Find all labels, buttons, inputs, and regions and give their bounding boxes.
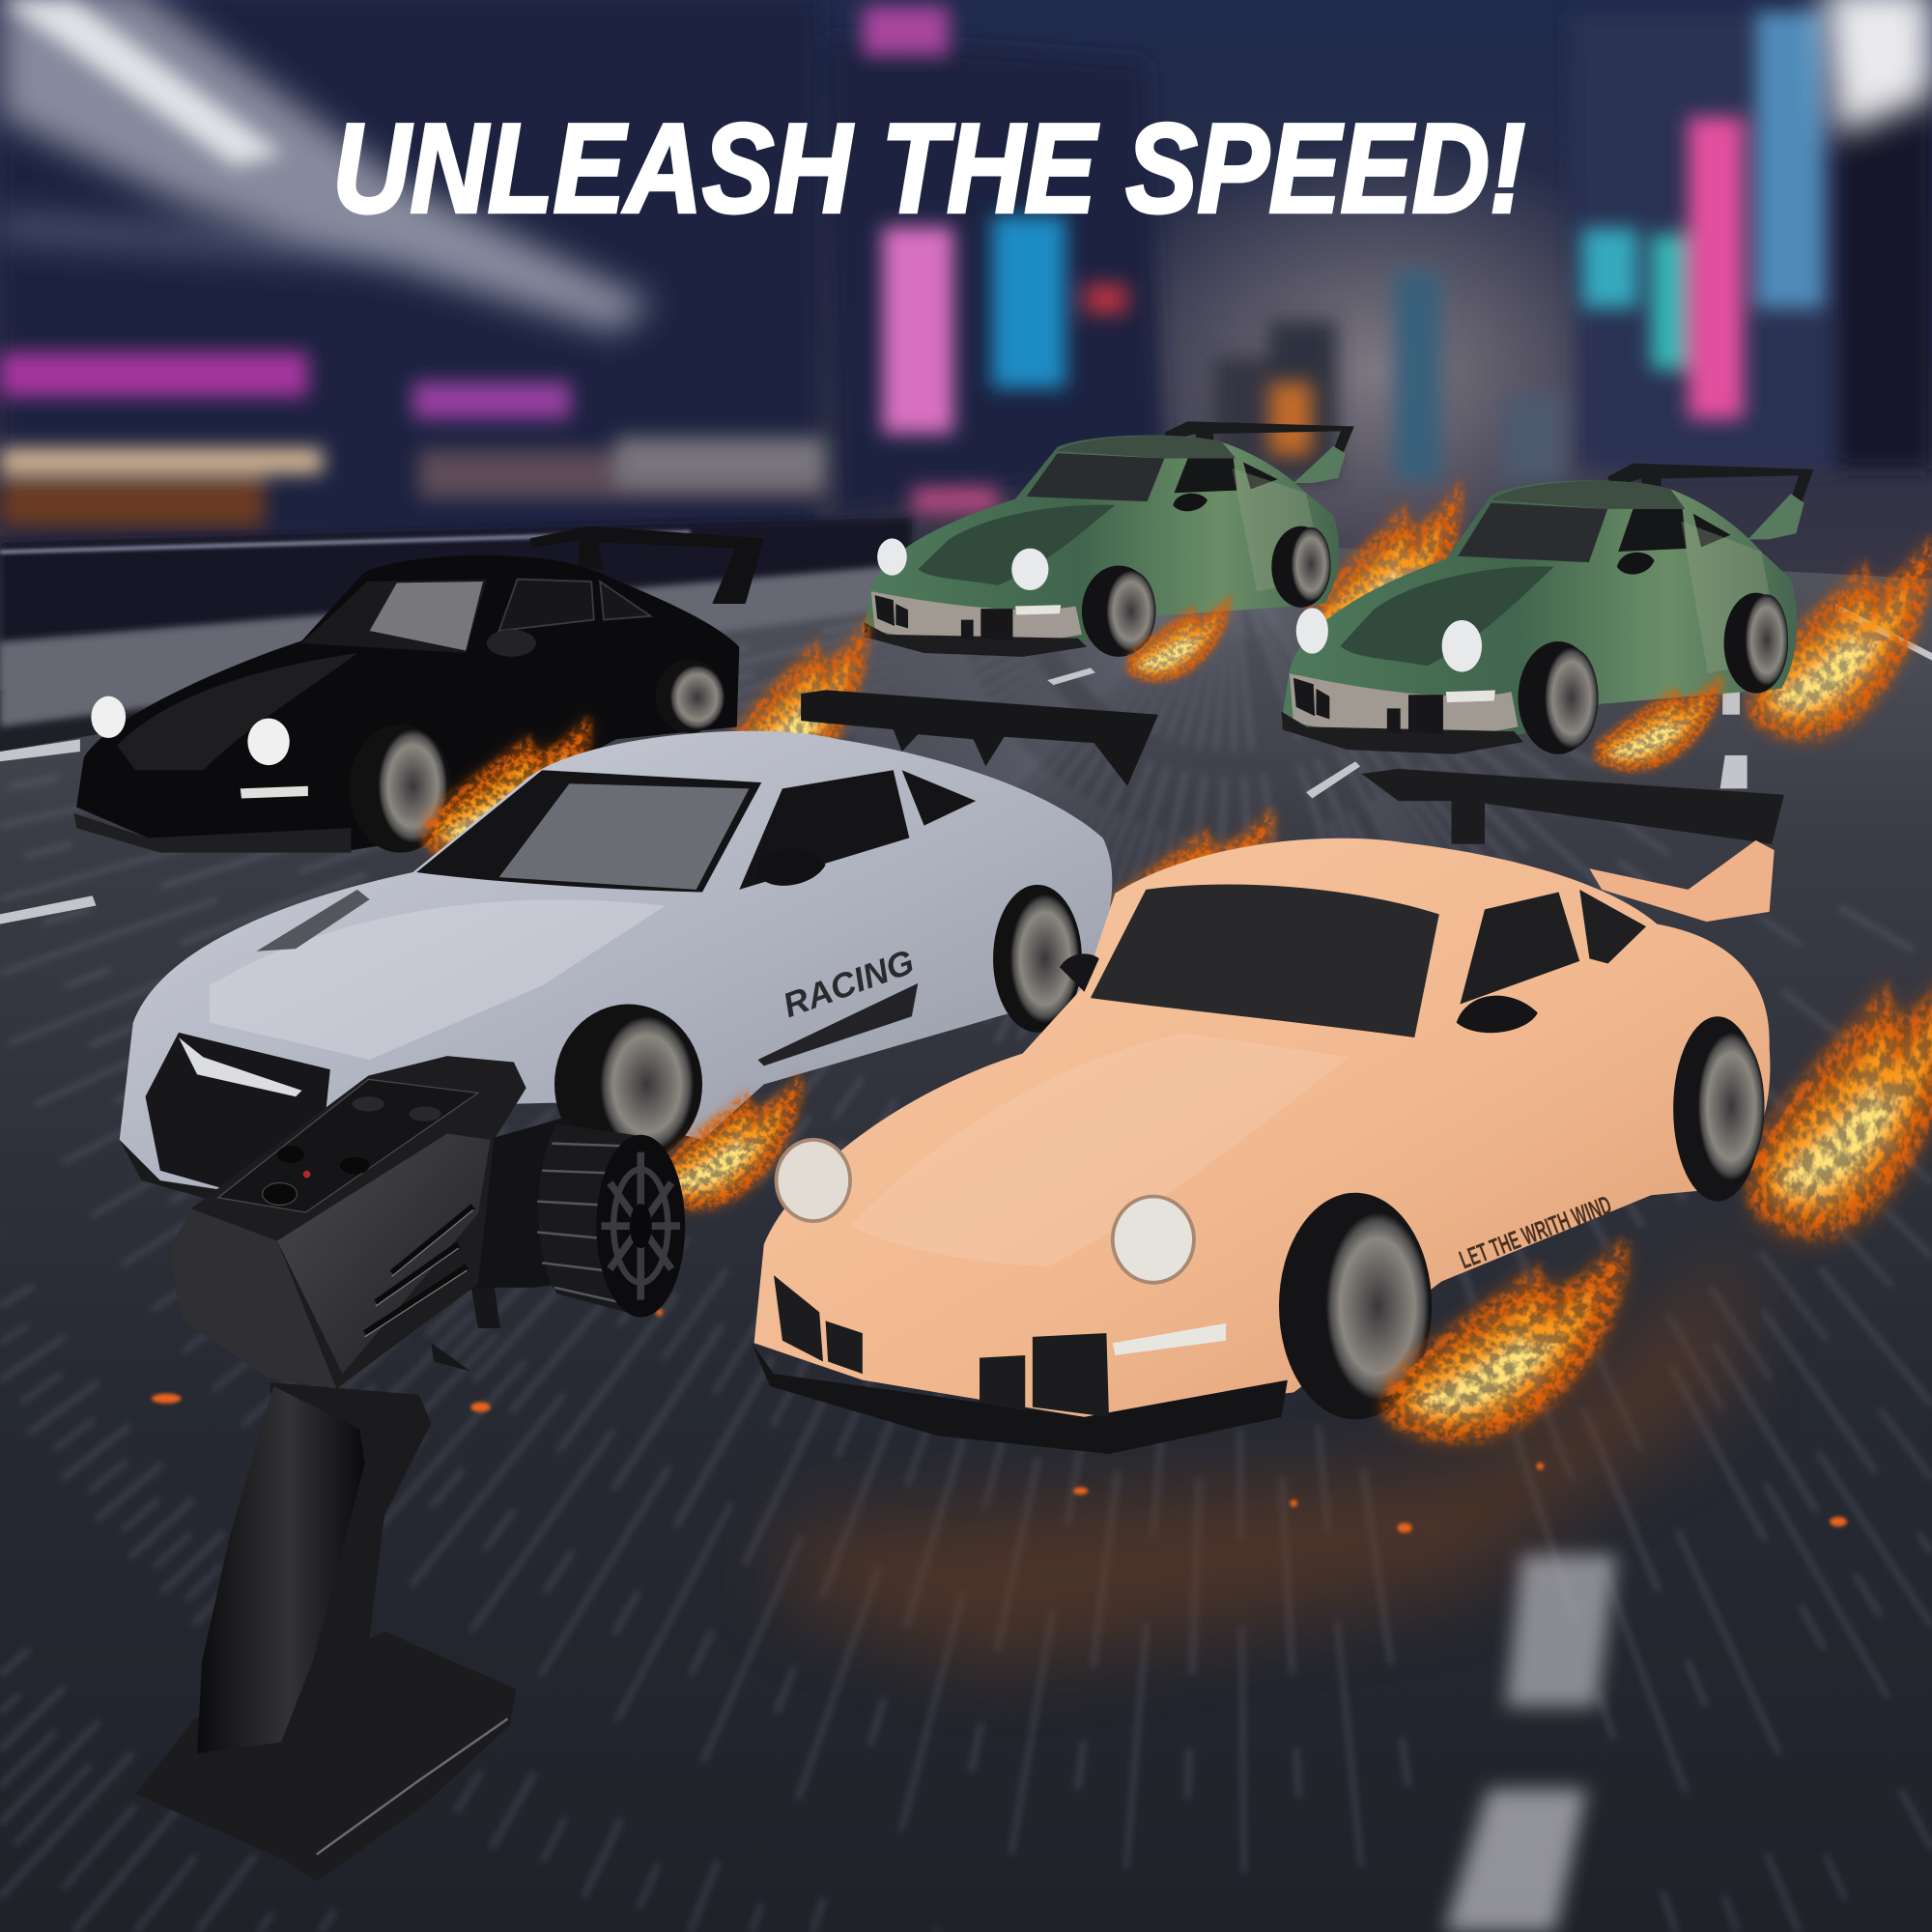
black front wheel bbox=[349, 724, 452, 853]
orange side windows bbox=[1460, 890, 1646, 1005]
controller head bbox=[169, 1056, 526, 1389]
black mirror bbox=[487, 630, 536, 657]
flame: near green rear bbox=[1749, 536, 1932, 739]
control panel bbox=[218, 1079, 478, 1212]
orange wing bbox=[1361, 769, 1784, 844]
black rear wheel bbox=[656, 659, 724, 733]
hood lighter panel bbox=[210, 899, 666, 1060]
hood crease bbox=[850, 1033, 1350, 1266]
orange reflection on road bbox=[788, 1244, 1749, 1663]
controller grip bbox=[197, 1382, 431, 1824]
car: orange bbox=[752, 769, 1932, 1454]
flame: orange front wheel bbox=[1386, 1238, 1626, 1441]
controller base bbox=[135, 1632, 516, 1882]
trigger bbox=[431, 1284, 500, 1372]
flame: silver car front bbox=[653, 1074, 802, 1209]
road surface bbox=[0, 532, 1932, 1932]
lane markings bbox=[0, 604, 1932, 924]
vents bbox=[365, 1207, 473, 1333]
orange mirrors bbox=[1457, 996, 1538, 1033]
front splitter bbox=[120, 1140, 241, 1202]
flame: black rear bbox=[727, 616, 868, 791]
car: far green bbox=[864, 421, 1462, 682]
wheel cylinder bbox=[538, 1123, 640, 1316]
head top plane bbox=[277, 1133, 491, 1374]
orange bumper bbox=[752, 1343, 1288, 1454]
black headlights bbox=[91, 696, 126, 738]
car: silver GT-R: RACING bbox=[778, 942, 919, 1025]
flame: far green side bbox=[1127, 595, 1230, 682]
orange ducktail bbox=[1589, 840, 1775, 922]
silver body bbox=[120, 731, 1112, 1195]
car: near green bbox=[1282, 464, 1932, 771]
orange front wheel bbox=[1279, 1193, 1432, 1419]
black bumper bbox=[74, 813, 352, 853]
car: black bbox=[74, 526, 868, 862]
buttons bbox=[277, 1146, 304, 1163]
door mirror bbox=[757, 849, 826, 886]
front grille bbox=[146, 1033, 330, 1195]
wheel face bbox=[596, 1135, 685, 1318]
sill lettering: LET THE WRITH WIND bbox=[1456, 1190, 1615, 1274]
hood sheen bbox=[117, 653, 357, 770]
rear wheel bbox=[993, 885, 1082, 1033]
black body bbox=[76, 555, 739, 850]
head side plane bbox=[169, 1208, 336, 1389]
road ember sparks bbox=[152, 1309, 1847, 1533]
flame: near green side bbox=[1596, 674, 1721, 771]
title: UNLEASH THE SPEED! bbox=[332, 97, 1525, 239]
flame: silver car rear bbox=[1091, 809, 1273, 963]
car: silver GT-R bbox=[120, 690, 1273, 1209]
flame: far green rear bbox=[1306, 481, 1462, 665]
rear wing bbox=[801, 690, 1158, 786]
orange headlights bbox=[777, 1140, 850, 1221]
lane marking foreground bbox=[1444, 1555, 1616, 1932]
orange windscreen bbox=[1091, 884, 1439, 1037]
flame: orange rear bbox=[1749, 946, 1932, 1236]
flame: black side bbox=[425, 716, 589, 862]
grip texture bbox=[197, 1386, 365, 1753]
windscreen bbox=[416, 770, 761, 892]
side windows bbox=[739, 770, 976, 890]
black windscreen bbox=[301, 579, 487, 653]
black side windows bbox=[499, 579, 650, 631]
orange rear wheel bbox=[1673, 1016, 1762, 1202]
orange intakes bbox=[774, 1275, 1109, 1417]
orange body bbox=[754, 838, 1770, 1417]
front wheel bbox=[554, 1005, 702, 1164]
remote controller bbox=[135, 1056, 685, 1882]
road motion streaks bbox=[0, 554, 1932, 1932]
hood vent bbox=[256, 890, 370, 952]
side graphic bbox=[757, 983, 918, 1065]
black wing bbox=[529, 526, 764, 604]
wheel neck bbox=[474, 1115, 579, 1288]
